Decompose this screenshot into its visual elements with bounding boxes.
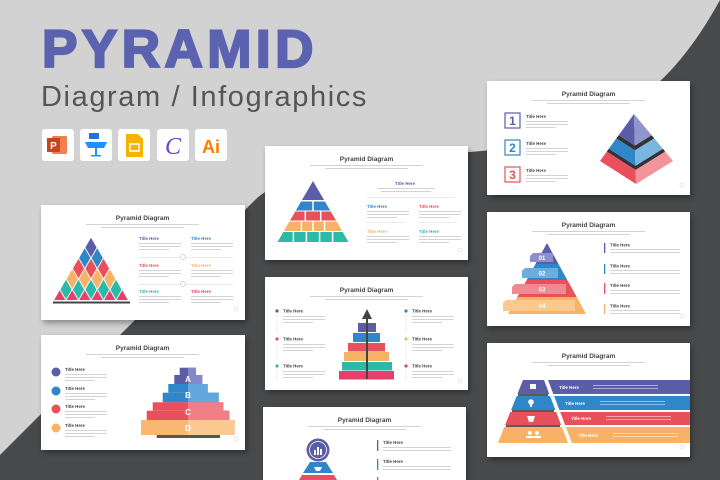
stepped pyramid: D [185, 424, 191, 433]
tab pyramid: 02 [539, 272, 546, 278]
icon: canva: C [165, 134, 182, 160]
icon: illustrator [195, 129, 227, 161]
slide: icon circle pyramid (cropped) [263, 407, 466, 480]
circle icon pyramid [299, 438, 337, 480]
bullet text right: Title Here [412, 308, 432, 314]
text blocks: Title Here [367, 229, 387, 234]
slide: arrow pyramid [265, 277, 468, 390]
split pyramid bars: Title Here [578, 433, 598, 438]
text list [377, 440, 451, 480]
bullet text right: Title Here [412, 336, 432, 342]
text grid: Title Here [191, 263, 211, 268]
slide: diamond pyramid [41, 205, 245, 320]
text list: Title Here [383, 440, 403, 445]
slide: numbered 3D pyramid [487, 81, 690, 195]
bullet text left: Title Here [283, 308, 303, 314]
stepped pyramid: C [185, 408, 191, 417]
text blocks: Title Here [395, 181, 416, 186]
app icons row [42, 129, 227, 161]
icon list [52, 367, 107, 437]
icon list: Title Here [65, 367, 85, 372]
number boxes: 1 [509, 114, 516, 128]
text list: Title Here [610, 304, 630, 308]
icon: google slides [118, 129, 150, 161]
text grid: Title Here [139, 289, 159, 294]
stepped pyramid [141, 368, 235, 438]
text grid: Title Here [191, 236, 211, 241]
icon list: Title Here [65, 423, 85, 428]
title: PYRAMID [42, 20, 318, 79]
icon: illustrator: Ai [202, 137, 220, 157]
text blocks [367, 181, 461, 243]
icon list: Title Here [65, 386, 85, 391]
number boxes: 3 [509, 168, 516, 182]
slide: split pyramid with bars [487, 343, 690, 457]
icon: keynote [80, 129, 112, 161]
icon: canva [157, 129, 189, 161]
split pyramid bars: Title Here [571, 416, 591, 421]
text list: Title Here [610, 242, 630, 248]
arrow bar pyramid [339, 309, 394, 380]
bullet text left: Title Here [283, 336, 303, 342]
tab pyramid: 04 [539, 304, 546, 310]
text list: Title Here [610, 283, 630, 288]
slide: stepped ABCD pyramid [41, 335, 245, 450]
bullet text left: Title Here [283, 364, 303, 368]
tab pyramid: 03 [539, 288, 546, 294]
subtitle: Diagram / Infographics [41, 81, 368, 113]
split pyramid bars: Title Here [565, 401, 585, 406]
text grid: Title Here [191, 289, 211, 294]
text grid: Title Here [139, 263, 159, 268]
text list: Title Here [383, 459, 403, 464]
brick pyramid [278, 181, 348, 242]
text list: Title Here [610, 264, 630, 268]
slide: numbered 3D pyramid: Title Here [526, 114, 546, 119]
slide: numbered 3D pyramid: Title Here [526, 141, 546, 146]
stepped pyramid: A [185, 375, 191, 384]
slide: numbered tab pyramid [487, 212, 690, 326]
bullet text right [404, 308, 454, 381]
text blocks: Title Here [419, 229, 439, 234]
stepped pyramid: B [185, 391, 191, 400]
split pyramid bars [498, 380, 690, 443]
icon list: Title Here [65, 404, 85, 409]
slide: brick pyramid [265, 146, 468, 260]
text blocks: Title Here [419, 204, 439, 209]
tab pyramid [503, 243, 586, 314]
slide: numbered 3D pyramid: Title Here [526, 168, 546, 173]
split pyramid bars: Title Here [559, 385, 579, 390]
bullet text right: Title Here [412, 364, 432, 368]
3D pyramid [600, 114, 673, 184]
icon: powerpoint: P [50, 141, 57, 152]
icon: powerpoint [42, 129, 74, 161]
text blocks: Title Here [367, 204, 387, 209]
text grid [139, 236, 233, 303]
diamond pyramid [53, 238, 130, 304]
bullet text left [275, 308, 325, 381]
number boxes: 2 [509, 141, 516, 155]
text grid: Title Here [139, 236, 159, 241]
text list [604, 242, 680, 314]
number boxes [505, 113, 520, 182]
tab pyramid: 01 [539, 256, 546, 262]
